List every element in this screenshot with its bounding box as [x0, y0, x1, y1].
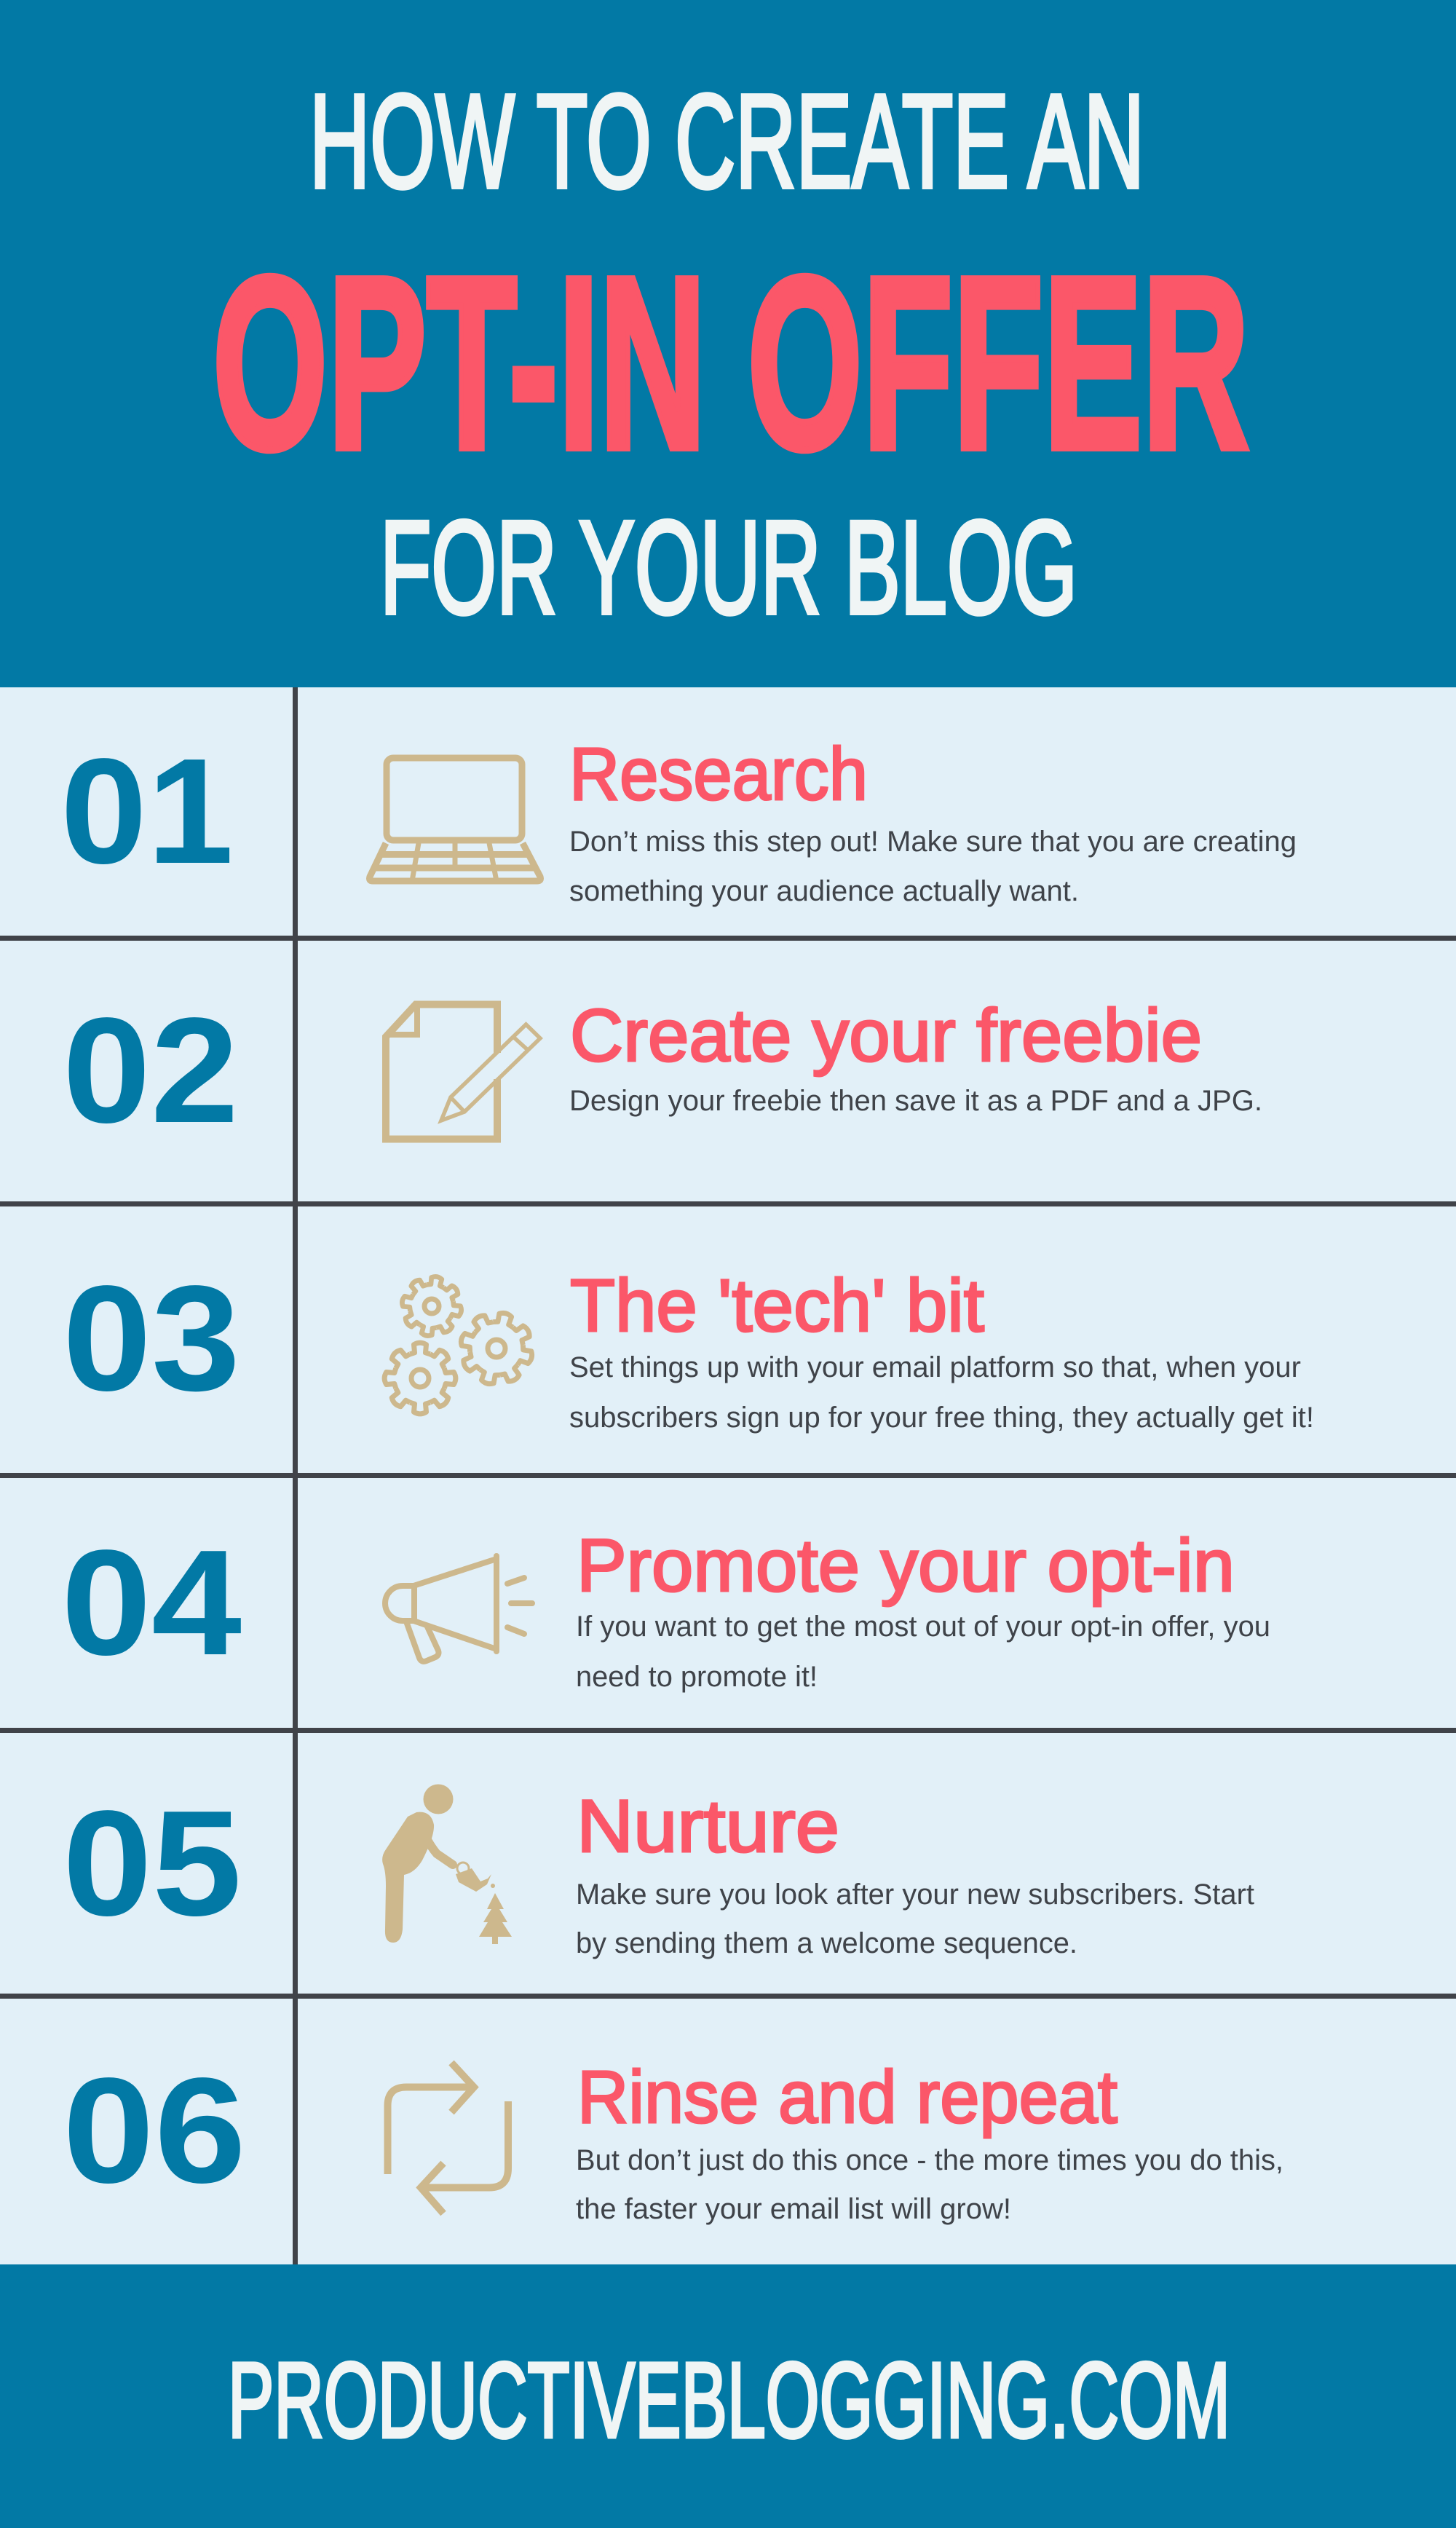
step 6: rinse and repeat [63, 2047, 1283, 2225]
header banner [0, 0, 1456, 687]
description: Don’t miss this step out! Make sure that you are creating [569, 826, 1297, 858]
description [576, 1611, 1270, 1693]
description [576, 2144, 1283, 2225]
heading: Rinse and repeat [577, 2055, 1117, 2138]
number 01: 01 [60, 727, 234, 895]
heading: Nurture [577, 1785, 839, 1868]
step 3: the tech bit [63, 1255, 1314, 1434]
number 03: 03 [63, 1255, 240, 1422]
description: Set things up with your email platform so that, when your [569, 1351, 1301, 1383]
number 02: 02 [63, 987, 239, 1154]
number 06: 06 [63, 2047, 246, 2214]
table grid lines [0, 687, 1456, 2264]
icon: megaphone [385, 1556, 532, 1662]
icon: gears [384, 1271, 541, 1414]
step 4: promote your opt-in [61, 1519, 1270, 1693]
description: the faster your email list will grow! [576, 2193, 1011, 2225]
heading: Create your freebie [570, 994, 1202, 1077]
description: But don’t just do this once - the more times you do this, [576, 2144, 1283, 2176]
description [569, 1351, 1314, 1434]
description [569, 826, 1297, 907]
description: by sending them a welcome sequence. [576, 1927, 1077, 1959]
description: Make sure you look after your new subscribers. Start [576, 1879, 1254, 1911]
heading: Promote your opt-in [577, 1524, 1235, 1607]
step 2: create your freebie [63, 987, 1262, 1154]
icon: person watering a tree [382, 1784, 512, 1944]
description: need to promote it! [576, 1661, 818, 1693]
step 1: research [60, 727, 1297, 907]
title line 3: FOR YOUR BLOG [380, 493, 1077, 641]
description: If you want to get the most out of your opt-in offer, you [576, 1611, 1270, 1643]
description: Design your freebie then save it as a PDF and a JPG. [569, 1085, 1262, 1117]
number 05: 05 [63, 1780, 242, 1947]
icon: document and pencil [386, 1005, 540, 1139]
background panel [0, 687, 1456, 2267]
number 04: 04 [61, 1519, 242, 1686]
description [576, 1879, 1254, 1959]
step 5: nurture [63, 1780, 1254, 1959]
heading: Research [569, 732, 868, 815]
footer banner [0, 2264, 1456, 2528]
heading: The 'tech' bit [570, 1264, 984, 1347]
icon: laptop [370, 758, 540, 881]
description: subscribers sign up for your free thing, they actually get it! [569, 1402, 1314, 1434]
description: something your audience actually want. [569, 875, 1079, 907]
icon: repeat arrows [387, 2063, 508, 2213]
